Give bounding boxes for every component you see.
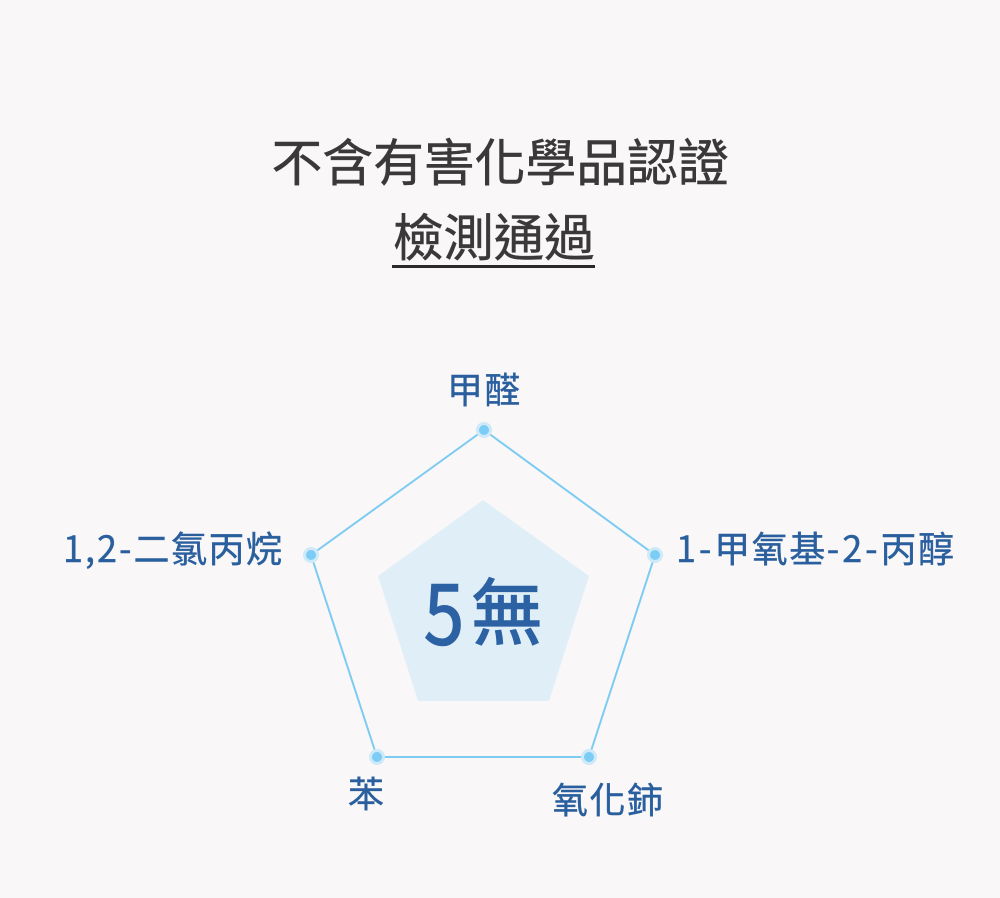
center label bbox=[424, 549, 543, 668]
title underline bbox=[392, 265, 595, 268]
label: dichloropropane: 1,2-二氯丙烷 bbox=[63, 521, 283, 573]
label: 1-methoxy-2-propanol: 1-甲氧基-2-丙醇 bbox=[676, 521, 955, 573]
label: formaldehyde: 甲醛 bbox=[447, 362, 522, 414]
label: benzene: 苯 bbox=[348, 766, 386, 818]
title line 1: 不含有害化學品認證 bbox=[272, 122, 729, 196]
center label: 無 bbox=[471, 555, 543, 660]
outer pentagon bbox=[311, 430, 655, 757]
center label: 5 bbox=[424, 549, 464, 668]
inner pentagon bbox=[378, 500, 589, 701]
label: cerium oxide: 氧化鈰 bbox=[552, 772, 665, 824]
title line 2 underlined: 檢測通過 bbox=[393, 198, 595, 271]
data points bbox=[303, 422, 663, 765]
